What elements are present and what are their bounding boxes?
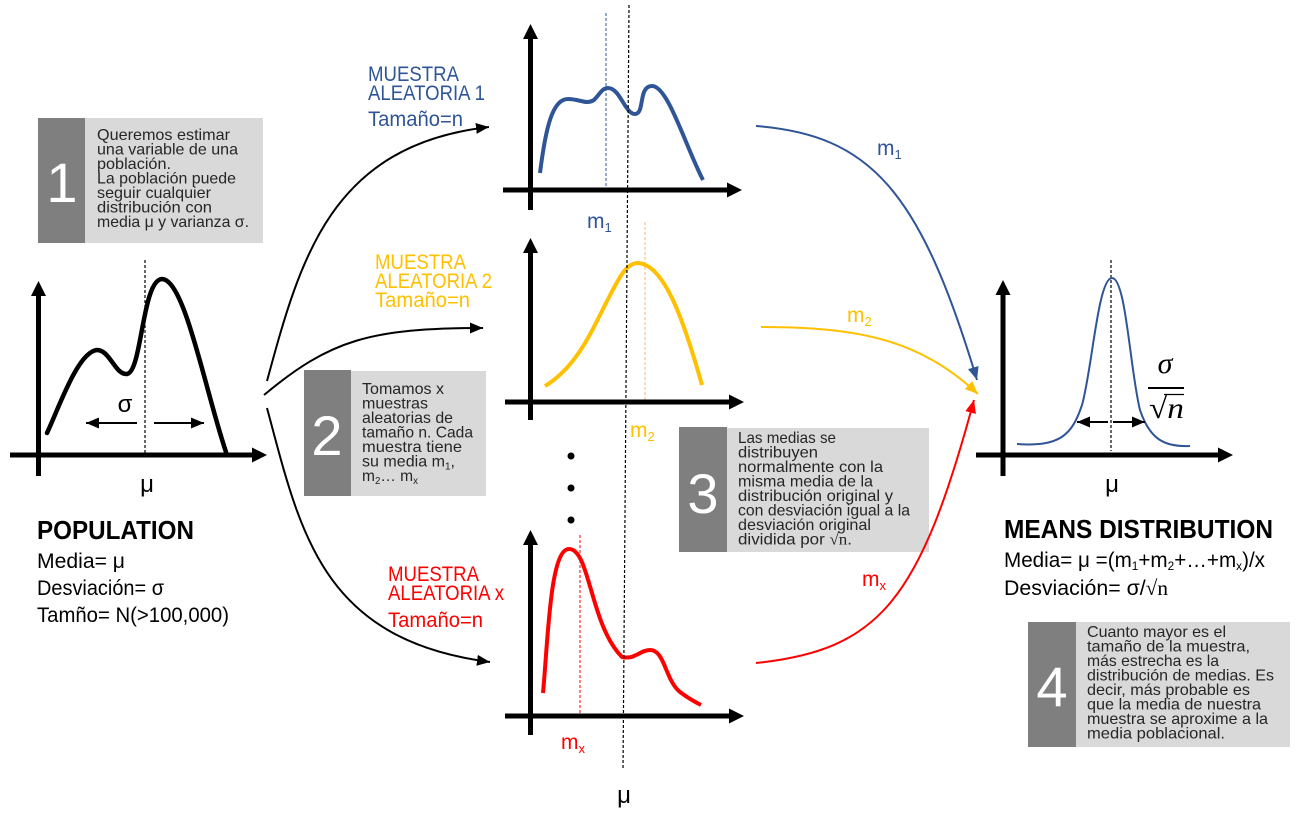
panel: step 1 callout: La población puede (97, 170, 236, 188)
panel: step 4 callout: muestra se aproxime a la (1087, 711, 1268, 728)
label: sample 1 (368, 63, 485, 131)
chart: sample 1 (503, 13, 742, 235)
panel: step 4 callout: que la media de nuestra (1087, 696, 1261, 714)
panel: step 3 callout: distribución original y (738, 488, 893, 505)
panel: step 2 callout: 2 (311, 404, 343, 467)
arrow: population to sample x (267, 408, 490, 662)
chart: means distribution: σ (1158, 347, 1174, 380)
label: mx: x (880, 578, 886, 593)
heading and stats: means distribution: x (1236, 559, 1242, 573)
panel: step 2 callout: , (451, 454, 455, 470)
label: sample x: Tamaño=n (388, 609, 483, 632)
panel: step 4 callout: distribución de medias. Es (1087, 668, 1274, 684)
chart: means distribution: μ (1105, 471, 1119, 498)
label: sample 1: Tamaño=n (368, 108, 463, 131)
heading and stats: means distribution: +…+m (1174, 549, 1236, 572)
heading and stats: means distribution: )/x (1242, 549, 1265, 572)
arrow: sample 1 mean to means distribution (756, 126, 977, 380)
heading and stats: means distribution (1004, 514, 1273, 600)
panel: step 2 callout: m (362, 468, 375, 485)
population mean reference line: μ (617, 782, 631, 809)
label: sample 1: MUESTRA (368, 63, 459, 86)
arrow: population to sample 1 (267, 127, 489, 381)
chart: sample x (505, 530, 744, 756)
chart: sample 2 (505, 222, 744, 444)
chart: sample 2: 2 (648, 429, 655, 444)
panel: step 2 callout: 1 (445, 462, 451, 472)
heading and stats: means distribution: 1 (1132, 559, 1139, 573)
panel: step 4 callout: 4 (1036, 655, 1068, 718)
panel: step 1 callout: media μ y varianza σ. (97, 214, 249, 231)
panel: step 2 callout: aleatorias de (362, 410, 453, 427)
label: sample 2 (375, 251, 492, 312)
panel: step 2 callout: x (413, 476, 418, 487)
panel: step 2 callout: muestra tiene (362, 439, 462, 456)
panel: step 4 callout: Cuanto mayor es el (1087, 624, 1226, 641)
panel: step 1 callout (38, 118, 263, 243)
panel: step 1 callout: Queremos estimar (97, 127, 231, 144)
chart: sample x: m (561, 731, 578, 754)
heading and stats: means distribution: Desviación= σ/√n (1004, 576, 1169, 600)
panel: step 4 callout: decir, más probable es (1087, 682, 1250, 699)
chart: sample 2: m (630, 419, 648, 442)
ellipsis dots (568, 452, 574, 524)
chart: sample 1: 1 (604, 220, 612, 235)
label: sample x: ALEATORIA x (388, 582, 504, 605)
label: sample 2: Tamaño=n (375, 289, 470, 312)
panel: step 1 callout: seguir cualquier (97, 185, 212, 202)
label: m1: m (877, 137, 894, 160)
heading and stats: population: POPULATION (37, 515, 194, 545)
arrow: sample 2 mean to means distribution (761, 327, 978, 394)
panel: step 1 callout: 1 (46, 151, 78, 214)
panel: step 3 callout: con desviación igual a la (738, 502, 910, 520)
chart: population distribution: σ (118, 391, 133, 418)
chart: sample 1: m (587, 210, 604, 233)
chart: means distribution (976, 260, 1233, 498)
heading and stats: means distribution: 2 (1168, 559, 1175, 573)
panel: step 3 callout: misma media de la (738, 474, 873, 490)
label: m2: 2 (864, 314, 872, 329)
panel: step 4 callout (1028, 622, 1290, 747)
label: sample 2: MUESTRA (375, 251, 466, 274)
heading and stats: means distribution: +m (1138, 549, 1168, 572)
panel: step 2 callout: … m (380, 468, 413, 485)
panel: step 2 callout: muestras (362, 396, 428, 412)
panel: step 2 callout: su media m (362, 454, 445, 470)
panel: step 3 callout: desviación original (738, 517, 871, 534)
chart: sample x: x (578, 741, 586, 756)
label: sample 1: ALEATORIA 1 (368, 82, 485, 105)
label: m1: 1 (894, 147, 902, 162)
panel: step 4 callout: media poblacional. (1087, 726, 1225, 742)
panel: step 1 callout: una variable de una (97, 142, 238, 158)
panel: step 1 callout: distribución con (97, 200, 212, 216)
chart: means distribution: √n (1149, 392, 1184, 425)
chart: population distribution: μ (140, 471, 154, 498)
heading and stats: population: Media= μ (37, 550, 125, 573)
panel: step 2 callout (304, 370, 486, 496)
label: m2: m (847, 304, 864, 327)
heading and stats: means distribution: MEANS DISTRIBUTION (1004, 514, 1273, 544)
heading and stats: population: Desviación= σ (37, 577, 164, 600)
panel: step 3 callout: distribuyen (738, 444, 818, 462)
arrow: sample x mean to means distribution (756, 400, 974, 663)
population mean reference line (617, 5, 631, 809)
heading and stats: means distribution: Media= μ =(m (1004, 549, 1134, 572)
label: sample 2: ALEATORIA 2 (375, 270, 492, 293)
heading and stats: population (37, 515, 229, 627)
panel: step 4 callout: tamaño de la muestra, (1087, 638, 1250, 656)
panel: step 2 callout: 2 (375, 476, 381, 487)
panel: step 3 callout (679, 427, 929, 552)
panel: step 3 callout: Las medias se (738, 430, 836, 447)
panel: step 3 callout: normalmente con la (738, 459, 883, 476)
panel: step 3 callout: 3 (687, 462, 719, 525)
label: sample x (388, 563, 504, 632)
arrow: population to sample 2 (264, 328, 483, 395)
panel: step 3 callout: dividida por √n. (738, 532, 852, 548)
heading and stats: population: Tamño= N(>100,000) (37, 604, 229, 627)
panel: step 1 callout: población. (97, 156, 171, 173)
panel: step 2 callout: Tomamos x (362, 381, 444, 398)
panel: step 2 callout: tamaño n. Cada (362, 424, 473, 442)
panel: step 4 callout: más estrecha es la (1087, 653, 1219, 670)
chart: population distribution (10, 260, 267, 498)
label: sample x: MUESTRA (388, 563, 479, 586)
label: mx: m (862, 568, 880, 591)
